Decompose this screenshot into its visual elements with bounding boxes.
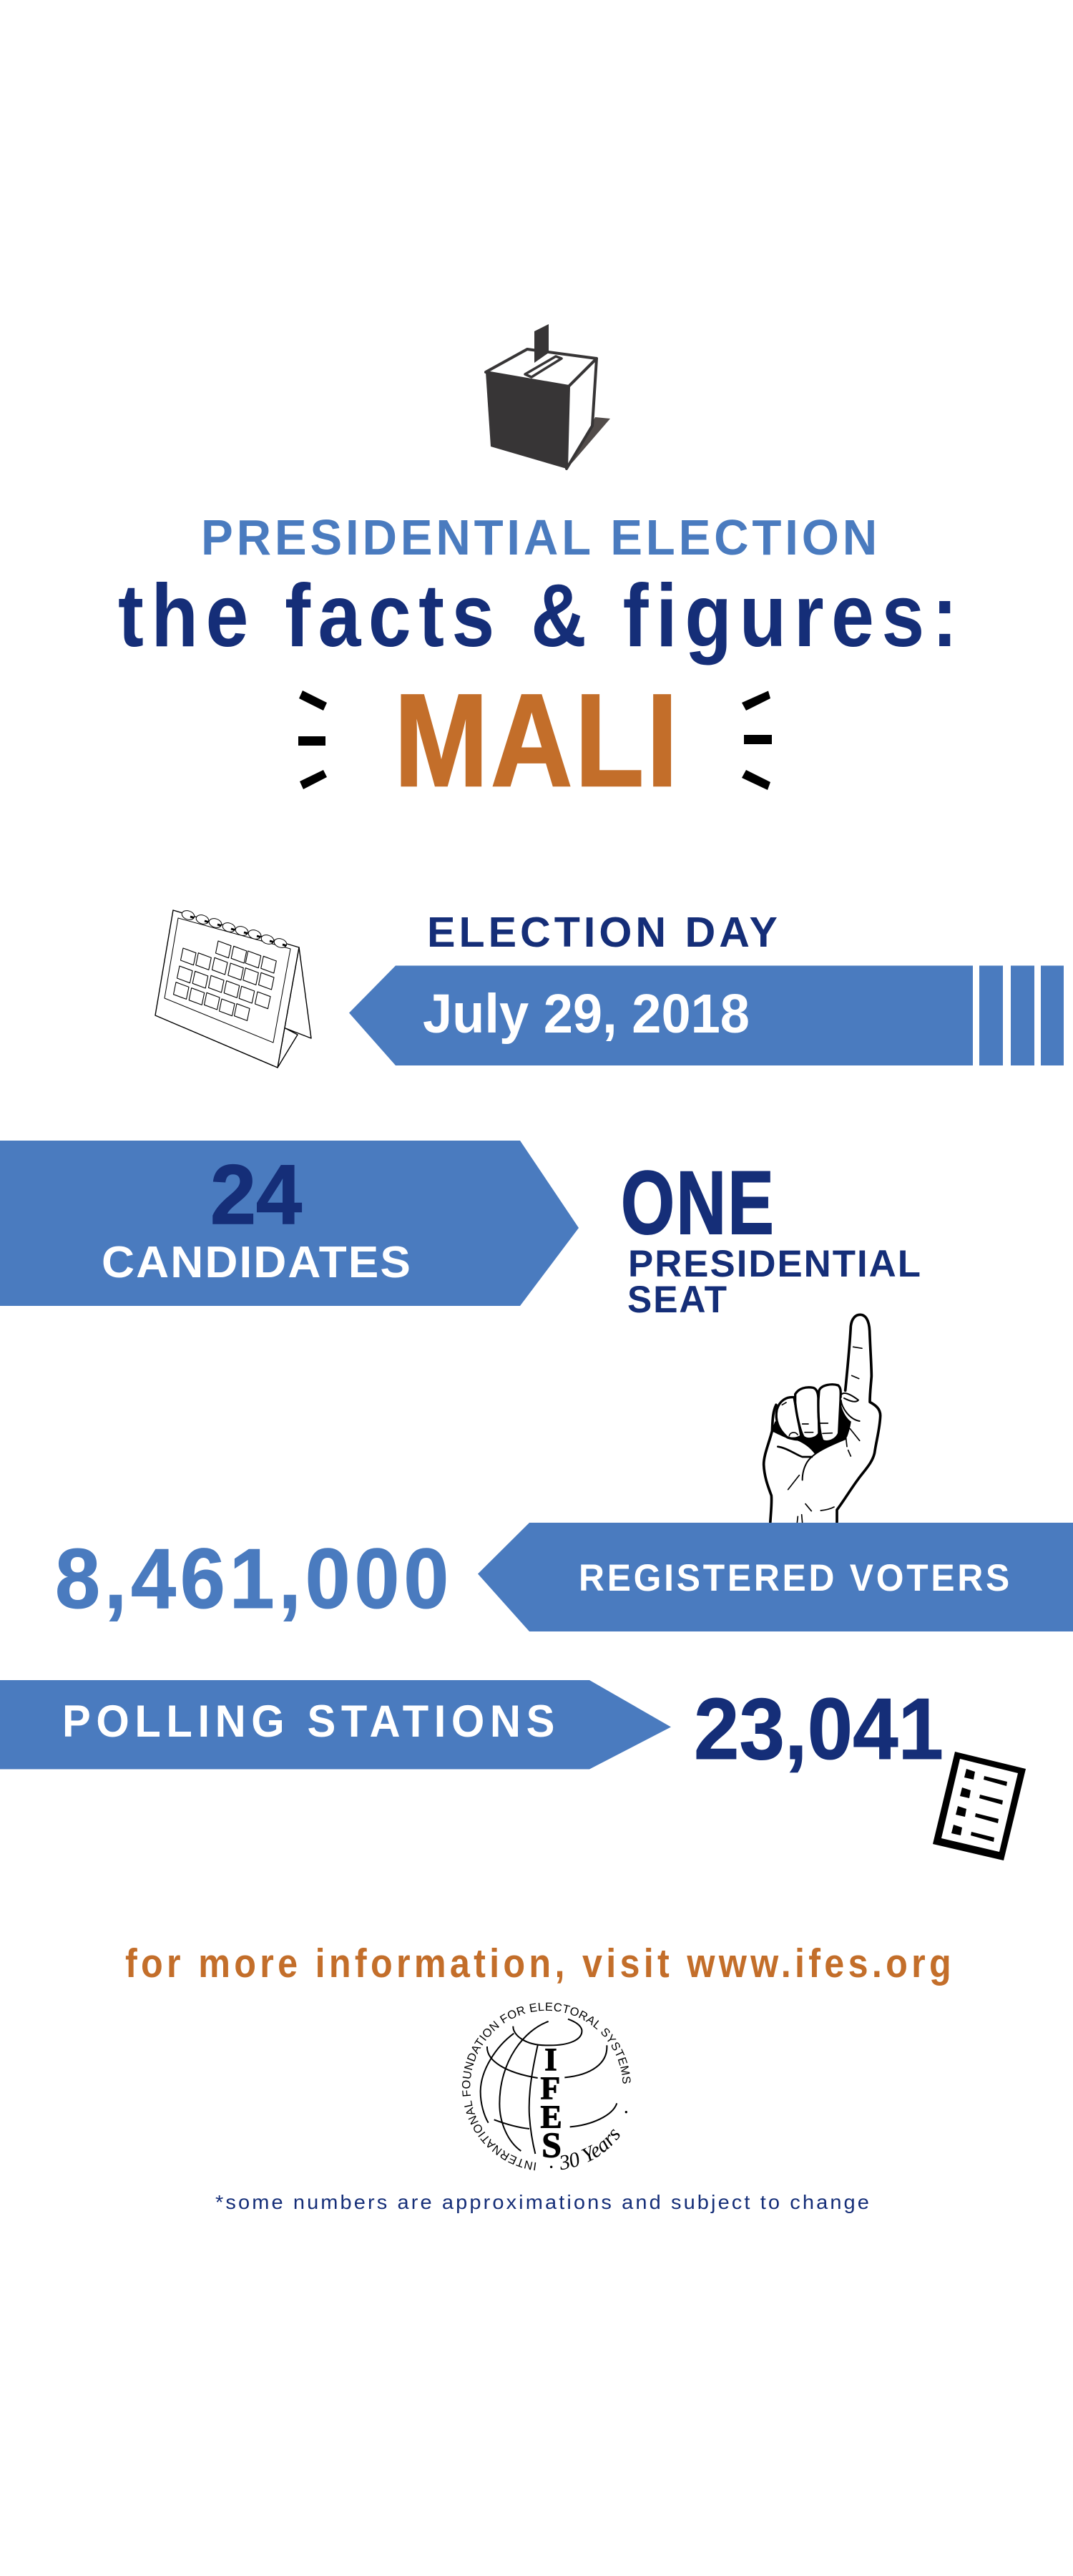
icon: ballot box — [486, 324, 610, 469]
banner: candidates — [0, 1141, 579, 1306]
candidates label: CANDIDATES — [102, 1238, 412, 1287]
title: country name Mali: MALI — [394, 666, 680, 814]
icon: desk calendar — [155, 909, 311, 1068]
heading: election day: ELECTION DAY — [427, 909, 781, 956]
logo: IFES globe: E — [541, 2099, 562, 2135]
logo: IFES globe: 30 Years — [561, 2129, 619, 2170]
heading: presidential election: PRESIDENTIAL ELECTION — [201, 509, 881, 565]
banner: election date — [349, 966, 1064, 1065]
block: one presidential seat — [621, 1153, 922, 1321]
block: one presidential seat: SEAT — [627, 1279, 728, 1321]
title: the facts and figures: the facts & figures: — [118, 567, 965, 665]
icon: right emphasis ticks — [742, 691, 772, 790]
logo: IFES globe: F — [540, 2070, 560, 2106]
logo: IFES globe: S — [542, 2124, 562, 2165]
stat: registered voters number: 8,461,000 — [55, 1531, 453, 1626]
polling stations label: POLLING STATIONS — [62, 1697, 560, 1747]
icon: ballot paper checklist — [933, 1752, 1026, 1860]
call to action: website: for more information, visit www.ifes.org — [125, 1941, 955, 1986]
icon: hand with raised index finger — [764, 1314, 881, 1524]
block: one presidential seat: ONE — [621, 1153, 775, 1253]
logo: IFES globe: I — [544, 2041, 557, 2077]
date text: July 29, 2018 — [423, 983, 750, 1045]
stat: polling stations number: 23,041 — [694, 1680, 944, 1777]
banner: polling stations — [0, 1680, 671, 1769]
block: one presidential seat: PRESIDENTIAL — [628, 1243, 922, 1285]
banner: registered voters — [478, 1523, 1073, 1631]
icon: left emphasis ticks — [298, 691, 327, 789]
footnote: *some numbers are approximations and subject to change — [215, 2191, 871, 2213]
registered voters label: REGISTERED VOTERS — [579, 1557, 1012, 1599]
logo: IFES globe: INTERNATIONAL FOUNDATION FOR ELECTORAL SYSTEMS — [462, 2002, 631, 2171]
candidates number: 24 — [210, 1148, 302, 1242]
